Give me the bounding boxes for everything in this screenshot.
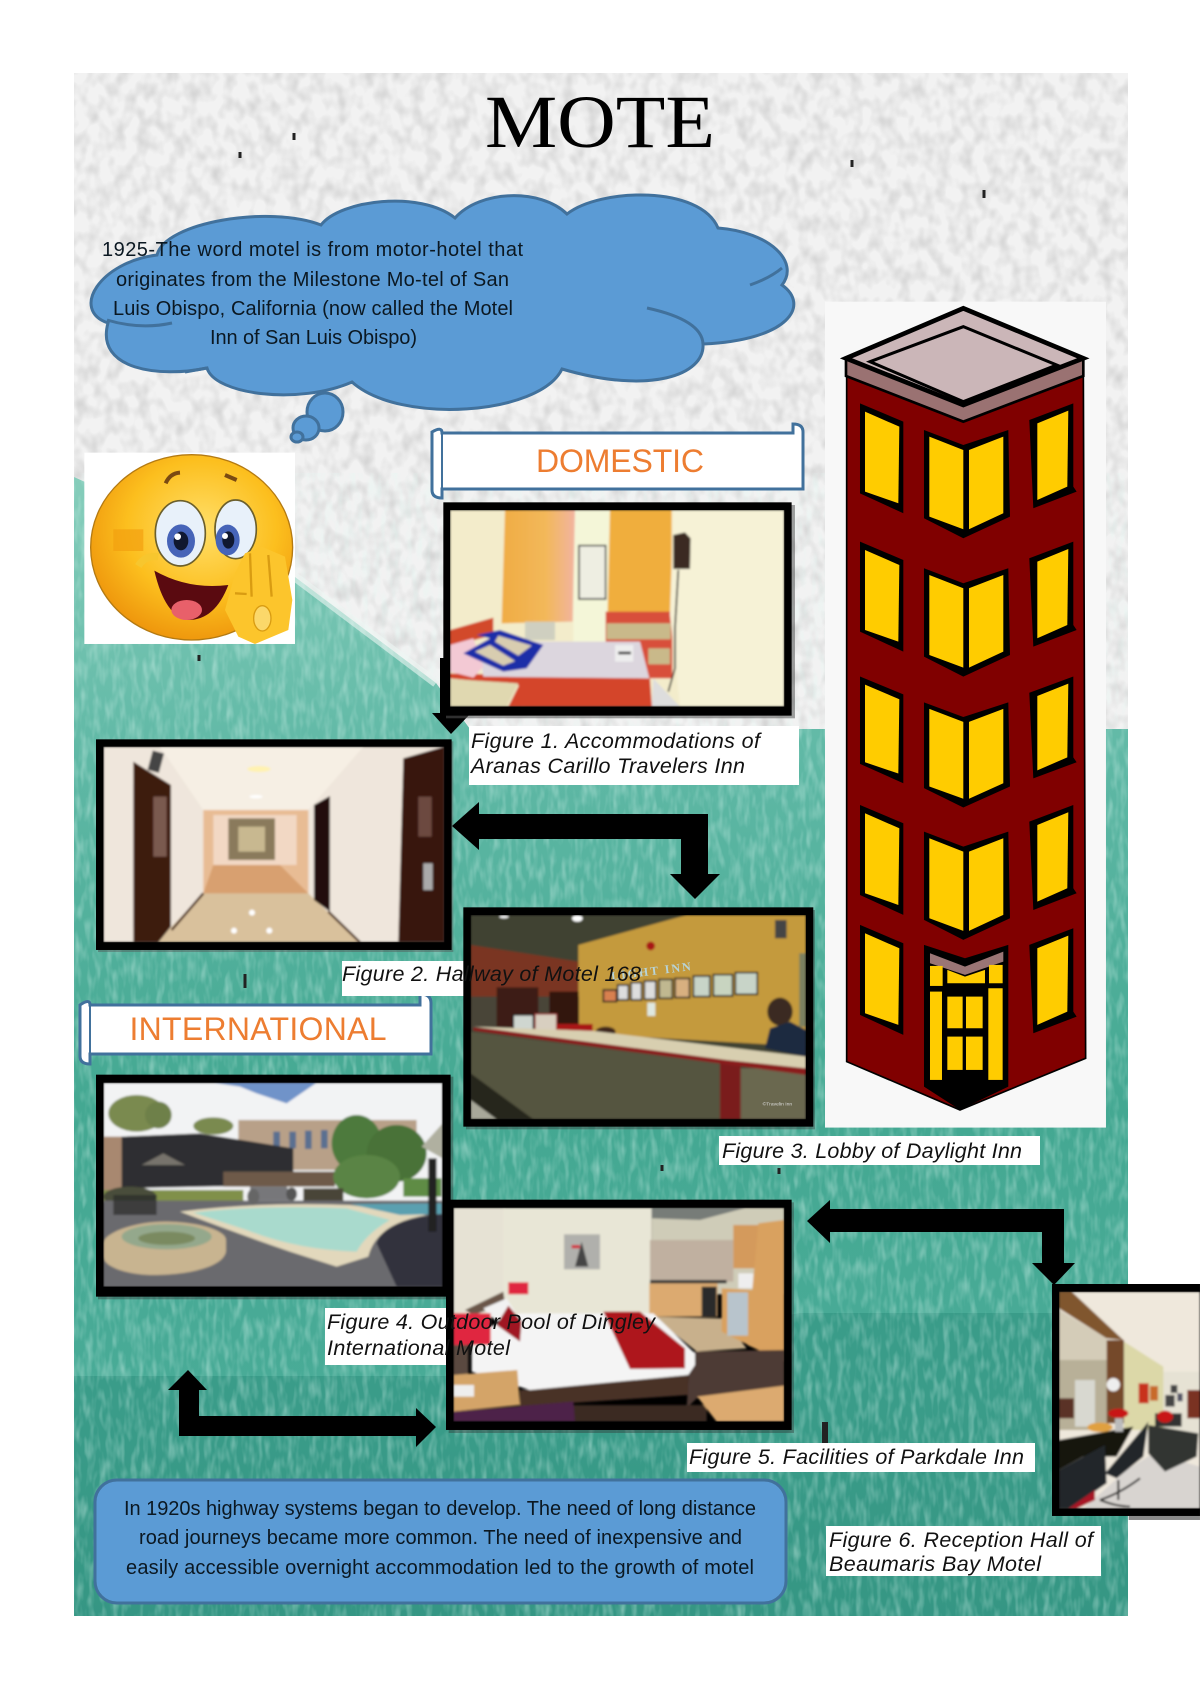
photo 3: lobby: LIGHT INN [610,959,693,983]
photo 1: accommodations [443,502,795,718]
thought cloud [91,195,794,442]
banner: international: INTERNATIONAL [130,1011,386,1047]
caption: figure 1: Aranas Carillo Travelers Inn [469,754,745,778]
cloud text: originates from the Milestone Mo-tel of San [116,269,509,291]
photo 5: facilities [446,1200,794,1433]
arrow: photo 2 to photo 3 [452,802,720,899]
title: MOTE [485,81,715,164]
cloud text [102,239,523,349]
arrow: photo 1 to photo 2 [432,658,471,734]
photo 3: lobby [463,907,815,1129]
arrow: photo 5 to photo 6 [807,1200,1075,1285]
cloud text: Inn of San Luis Obispo) [210,327,417,349]
caption boxes [325,726,1101,1576]
caption: figure 2: Figure 2. Hallway of Motel 168 [342,962,641,986]
cloud text: 1925-The word motel is from motor-hotel that [102,239,523,261]
photo 6: reception hall [1052,1284,1200,1520]
caption: figure 1 [469,729,762,778]
caption: figure 6 [829,1528,1095,1576]
caption: figure 1: Figure 1. Accommodations of [471,729,762,753]
photo 3: lobby: ©Travelin Inn [763,1100,792,1107]
photo 2: hallway [96,739,453,952]
icon: emoji [84,453,295,644]
illustration: hotel building [825,302,1106,1128]
textured background [74,73,1128,1616]
arrow: photo 4 to photo 5 [168,1370,436,1447]
caption: figure 4: International Motel [327,1336,511,1360]
photo 4: pool [96,1075,453,1299]
banner: international [80,994,431,1064]
caption: figure 5: Figure 5. Facilities of Parkdale Inn [689,1445,1024,1469]
banner: domestic: DOMESTIC [536,443,704,479]
bottom text box: In 1920s highway systems began to develop. The need of long distance [124,1498,756,1520]
cloud text: Luis Obispo, California (now called the Motel [113,298,513,320]
caption: figure 4 [327,1310,656,1360]
banner: domestic [432,424,803,498]
caption: figure 3: Figure 3. Lobby of Daylight Inn [722,1139,1022,1163]
bottom text box: road journeys became more common. The need of inexpensive and [139,1527,742,1549]
bottom text box: easily accessible overnight accommodation led to the growth of motel [126,1557,754,1579]
caption: figure 6: Figure 6. Reception Hall of [829,1528,1095,1552]
caption: figure 4: Figure 4. Outdoor Pool of Dingley [327,1310,656,1334]
bottom text box [95,1480,786,1603]
caption: figure 6: Beaumaris Bay Motel [829,1552,1042,1576]
